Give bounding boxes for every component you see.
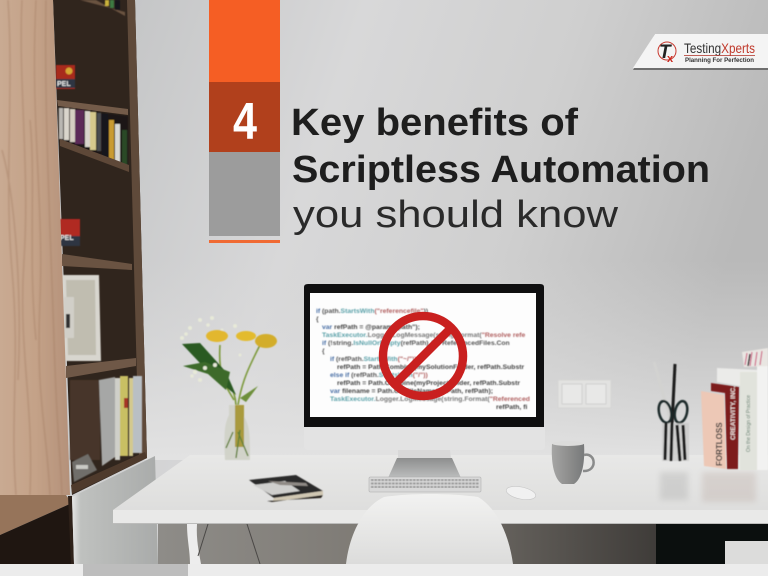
shelf 6	[71, 452, 147, 494]
cabinet body	[53, 0, 147, 495]
stack of books: On the Design of Practice	[746, 395, 752, 452]
monitor	[304, 284, 545, 478]
code text	[316, 308, 530, 411]
area under desk	[158, 524, 768, 564]
red box on middle shelf	[60, 219, 80, 246]
code text: {	[316, 316, 319, 323]
dark orange number block	[209, 82, 280, 152]
desk	[113, 455, 768, 524]
mug	[552, 441, 594, 484]
prohibition sign	[383, 316, 463, 396]
glass bottle	[224, 405, 250, 460]
top shelf with books	[80, 0, 125, 16]
colourful book on top	[742, 348, 768, 367]
yellow flowers	[206, 330, 228, 342]
chair	[346, 494, 513, 564]
code text: var refPath = @param("path");	[322, 324, 420, 331]
stand	[398, 450, 451, 458]
code text: refPath, fi	[496, 404, 527, 411]
bezel	[304, 284, 544, 427]
stack of books	[701, 348, 768, 470]
rightmost book	[757, 360, 768, 470]
white cabinet door	[72, 456, 158, 564]
light switch	[558, 380, 611, 408]
white book	[717, 368, 758, 470]
logo tagline: Planning For Perfection	[685, 57, 754, 64]
logo mark	[658, 42, 676, 65]
red box on middle shelf: PEL	[60, 235, 74, 242]
code text: TaskExecutor.Logger.LogMessage(string.Format("Resolve refe	[322, 332, 526, 339]
red box on upper shelf	[56, 65, 75, 89]
wood side panel	[0, 0, 70, 495]
title accent blocks	[209, 0, 280, 243]
orange block	[209, 0, 280, 82]
notebook and phone	[249, 475, 323, 502]
title: Key benefits of	[291, 102, 578, 144]
picture frame	[62, 275, 101, 361]
shelf 3	[60, 139, 129, 172]
books row	[58, 107, 128, 166]
orange underline	[209, 240, 280, 243]
white baby's breath	[180, 316, 242, 382]
reflections	[660, 472, 756, 502]
mouse	[505, 484, 537, 502]
code text: else if (refPath.StartsWith("/"))	[330, 372, 428, 379]
number 4: 4	[233, 93, 257, 151]
stack of books: FORTLOSS	[715, 422, 724, 466]
title	[291, 102, 710, 236]
code text: if (path.StartsWith("referencefile"))	[316, 308, 428, 315]
code text: var filename = Path.GetFileName(refPath, refPath);	[330, 388, 493, 395]
stems and leaves	[180, 316, 277, 405]
chin	[304, 427, 545, 450]
code text: refPath = Path.Combine(mySolutionFolder, refPath.Substr	[337, 364, 524, 371]
title: Scriptless Automation	[292, 149, 710, 191]
pen holder	[654, 362, 689, 461]
stack of books: CREATIVITY, INC.	[730, 386, 737, 440]
code text: refPath = Path.Combine(myProjectFolder, refPath.Substr	[337, 380, 520, 387]
logo mark: x	[667, 53, 674, 65]
shelf 5	[66, 358, 136, 378]
desk legs	[187, 524, 201, 564]
shelf 4	[62, 254, 132, 270]
shelf 2	[57, 100, 128, 115]
red box on upper shelf: PEL	[57, 81, 71, 88]
code text: TaskExecutor.Logger.LogMessage(string.Format("Referenced	[330, 396, 530, 403]
code text: {	[322, 348, 325, 355]
bottom strip	[0, 564, 768, 576]
low wood shelf	[0, 495, 74, 564]
logo name: TestingXperts	[684, 40, 755, 56]
flower vase	[180, 316, 277, 460]
title: you should know	[293, 194, 619, 236]
logo badge	[633, 34, 768, 70]
cabinet side frame	[127, 0, 147, 458]
grey block	[209, 152, 280, 236]
code text: if (refPath.StartsWith("~/"))	[330, 356, 417, 363]
code text: if (!string.IsNullOrEmpty(refPath) && ReferencedFiles.Con	[322, 340, 510, 347]
pink book	[701, 391, 726, 469]
keyboard	[369, 477, 481, 492]
books lower shelf	[70, 376, 142, 482]
screen	[310, 293, 536, 417]
bookcase	[0, 0, 158, 564]
red book	[711, 383, 739, 469]
logo mark: T	[659, 42, 672, 63]
